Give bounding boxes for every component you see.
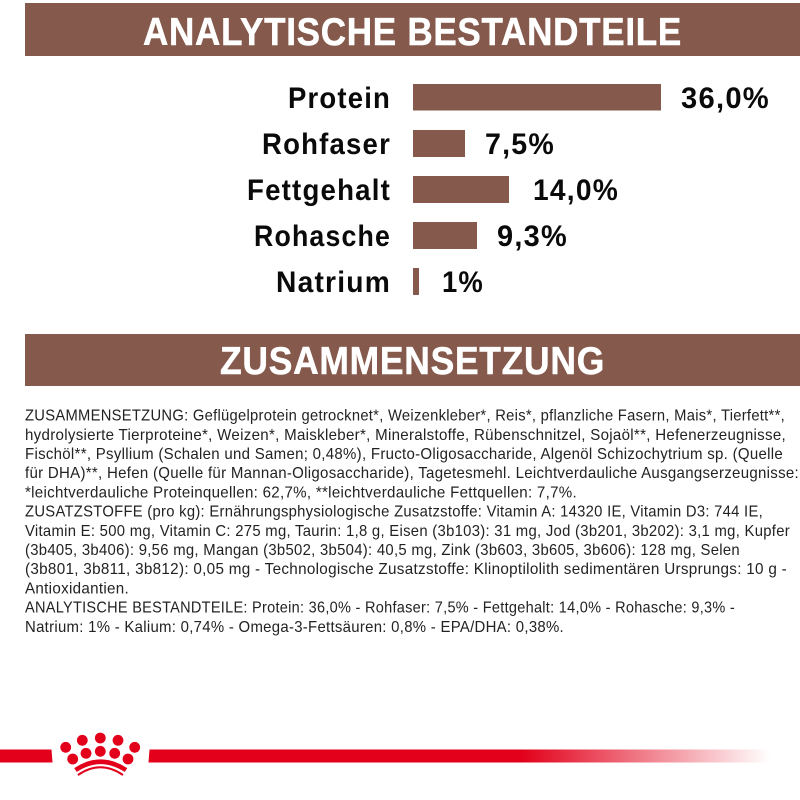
text block: composition details: Antioxidantien. [25, 580, 129, 597]
row: Natrium: Natrium [276, 266, 391, 299]
icon: royal crown logo [60, 733, 140, 775]
panel: analytical constituents heading [25, 3, 800, 56]
text block: composition details: Natrium: 1% - Kalium: 0,74% - Omega-3-Fettsäuren: 0,8% - EPA/DHA: 0,38%. [25, 619, 564, 636]
row: Rohfaser [262, 128, 555, 161]
text block: composition details: (3b801, 3b811, 3b812): 0,05 mg - Technologische Zusatzstoffe: Klinoptilolith sedimentären Ursprungs: 10 g - [25, 561, 787, 578]
panel: analytical constituents heading: ANALYTISCHE BESTANDTEILE [143, 11, 682, 54]
row: Fettgehalt [247, 174, 619, 207]
row: Natrium [276, 266, 484, 299]
row: Rohfaser: Rohfaser [262, 128, 391, 161]
text block: composition details: *leichtverdauliche Proteinquellen: 62,7%, **leichtverdauliche Fettquellen: 7,7%. [25, 484, 577, 501]
row: Rohasche: Rohasche [254, 220, 391, 253]
row: Rohasche: 9,3% [497, 220, 568, 253]
row: Rohasche [254, 220, 568, 253]
panel: composition heading: ZUSAMMENSETZUNG [220, 340, 605, 383]
panel: composition heading [25, 334, 800, 386]
text block: composition details: (3b405, 3b406): 9,56 mg, Mangan (3b502, 3b504): 40,5 mg, Zink (3b603, 3b605, 3b606): 128 mg, Selen [25, 542, 740, 559]
row: Protein: Protein [288, 82, 391, 115]
text block: composition details: ANALYTISCHE BESTANDTEILE: Protein: 36,0% - Rohfaser: 7,5% - Fettgehalt: 14,0% - Rohasche: 9,3% - [25, 600, 735, 617]
text block: composition details: Fischöl**, Psyllium (Schalen und Samen; 0,48%), Fructo-Oligosaccharide, Algenöl Schizochytrium sp. (Quelle [25, 446, 783, 463]
text block: composition details [25, 408, 799, 636]
text block: composition details: hydrolysierte Tierproteine*, Weizen*, Maiskleber*, Mineralstoffe, Rübenschnitzel, Sojaöl**, Hefenerzeugnisse, [25, 427, 786, 444]
text block: composition details: ZUSATZSTOFFE (pro kg): Ernährungsphysiologische Zusatzstoffe: Vitamin A: 14320 IE, Vitamin D3: 744 IE, [25, 504, 763, 521]
bar chart: analytical constituents [247, 82, 770, 299]
row: Natrium: 1% [442, 266, 484, 299]
row: Protein [288, 82, 770, 115]
footer: red brand line [0, 750, 770, 762]
row: Fettgehalt: Fettgehalt [247, 174, 391, 207]
row: Rohfaser: 7,5% [485, 128, 555, 161]
row: Protein: 36,0% [681, 82, 770, 115]
row: Fettgehalt: 14,0% [533, 174, 619, 207]
